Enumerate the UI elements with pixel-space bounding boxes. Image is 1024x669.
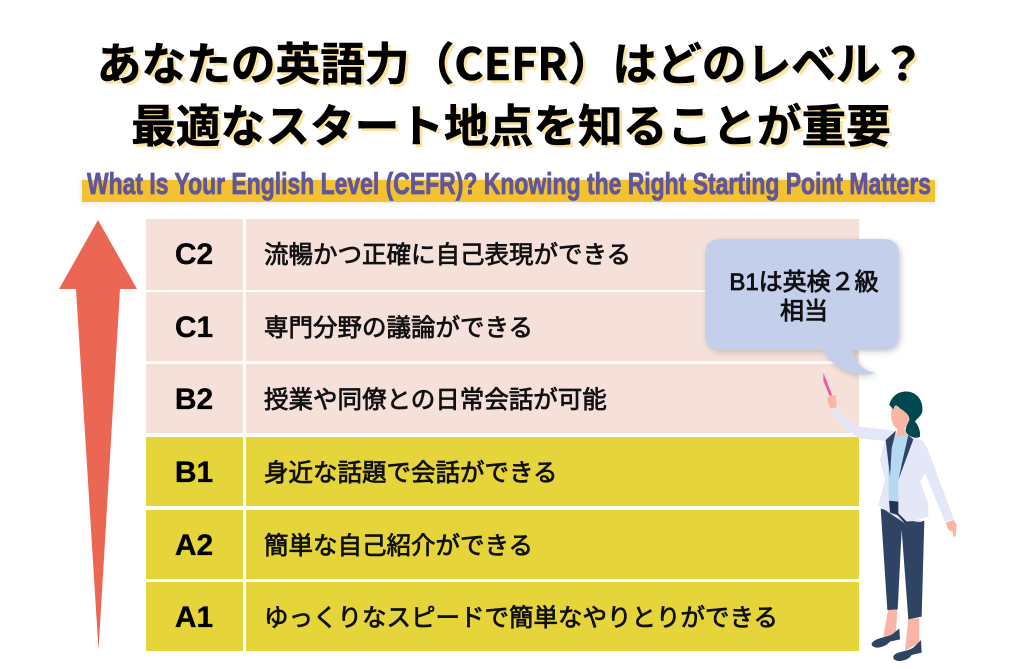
ankles — [883, 608, 919, 651]
hair — [889, 392, 922, 438]
arrow: rising level — [59, 220, 137, 650]
jacket — [878, 431, 954, 523]
bubble text: 相当 — [780, 298, 828, 325]
row C1 — [146, 292, 859, 361]
row C2: 流暢かつ正確に自己表現ができる — [264, 236, 631, 271]
row C1: 専門分野の議論ができる — [264, 309, 533, 344]
row B1: 身近な話題で会話ができる — [264, 454, 558, 489]
lower hand — [946, 520, 957, 537]
pointer — [823, 373, 832, 396]
shoes — [872, 628, 900, 648]
shirt — [888, 435, 908, 502]
row A2 — [146, 510, 859, 579]
inner waist — [889, 501, 922, 523]
illustration: woman pointing — [823, 372, 957, 661]
row B1: B1 — [175, 456, 213, 489]
row B1 — [146, 437, 859, 506]
row B2 — [146, 364, 859, 433]
raised hand — [827, 395, 837, 409]
trousers — [881, 508, 924, 619]
subtitle highlight bar — [82, 180, 935, 202]
row A2: 簡単な自己紹介ができる — [264, 527, 533, 562]
title — [97, 28, 925, 155]
speech bubble — [704, 238, 904, 379]
lapels — [886, 431, 896, 477]
row B2: 授業や同僚との日常会話が可能 — [264, 381, 607, 416]
raised arm — [830, 407, 893, 442]
row A1: A1 — [175, 601, 213, 634]
row C2 — [146, 219, 859, 290]
row A2: A2 — [175, 529, 213, 562]
bubble text: B1は英検２級 — [729, 269, 879, 296]
face and neck — [891, 403, 910, 437]
row C1: C1 — [175, 311, 213, 344]
row A1 — [146, 582, 859, 651]
bubble text — [729, 269, 879, 325]
english subtitle — [80, 166, 937, 204]
title line 1: あなたの英語力（CEFR）はどのレベル？ — [97, 28, 925, 93]
row A1: ゆっくりなスピードで簡単なやりとりができる — [264, 599, 778, 634]
row B2: B2 — [175, 383, 213, 416]
row C2: C2 — [175, 238, 213, 271]
title line 2: 最適なスタート地点を知ることが重要 — [131, 90, 891, 155]
